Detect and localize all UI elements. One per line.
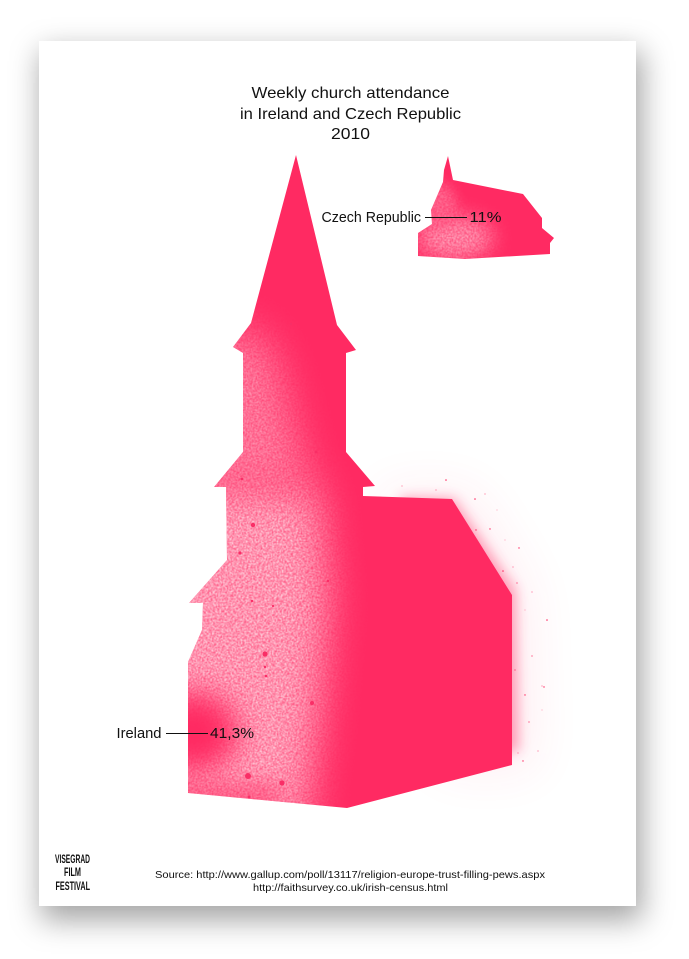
source text: Source: http://www.gallup.com/poll/13117/religion-europe-trust-filling-pews.aspx	[155, 869, 546, 881]
logo: Visegrad Film Festival	[55, 854, 90, 893]
infographic artwork	[55, 86, 554, 893]
logo: Visegrad Film Festival: FESTIVAL	[56, 881, 90, 893]
title: Weekly church attendance	[252, 85, 450, 102]
callout: Czech Republic 11%: Czech Republic	[322, 210, 421, 226]
paint overspray around large church	[380, 479, 548, 770]
callout: Czech Republic 11%	[322, 210, 502, 226]
title: 2010	[331, 126, 370, 143]
callout: Czech Republic 11%: 11%	[470, 210, 502, 226]
icon: small church silhouette, Czech Republic	[418, 156, 554, 259]
callout: Ireland 41,3%	[116, 726, 254, 742]
icon: large church silhouette, Ireland	[188, 155, 512, 808]
title: in Ireland and Czech Republic	[240, 106, 461, 123]
title	[240, 85, 461, 143]
source text	[155, 869, 546, 894]
panel: paper sheet with drop shadow	[39, 41, 636, 906]
callout: Ireland 41,3%: Ireland	[116, 726, 162, 742]
logo: Visegrad Film Festival: VISEGRAD	[55, 854, 90, 866]
source text: http://faithsurvey.co.uk/irish-census.html	[253, 882, 448, 894]
logo: Visegrad Film Festival: FILM	[64, 867, 81, 879]
callout: Ireland 41,3%: 41,3%	[210, 726, 254, 742]
